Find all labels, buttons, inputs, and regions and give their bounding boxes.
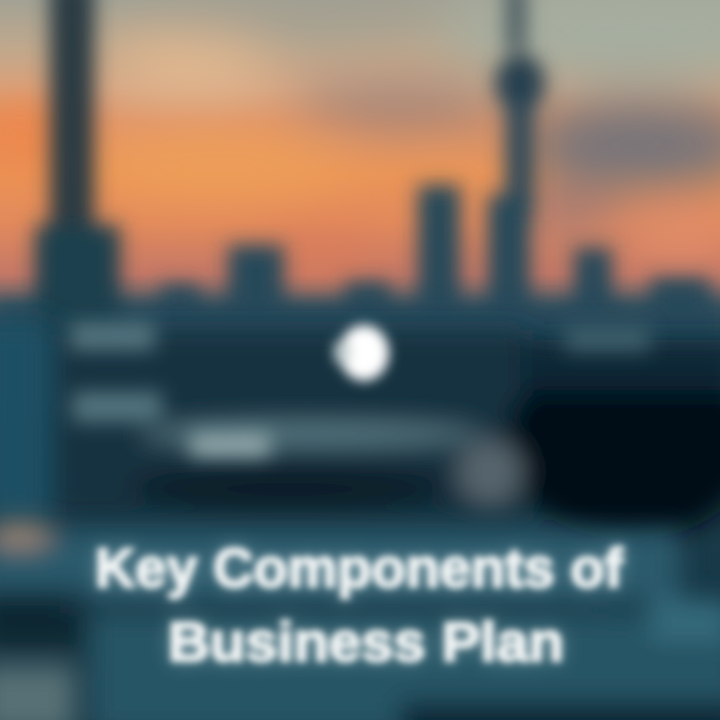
icon: skyline silhouettes — [0, 0, 720, 410]
title — [95, 536, 623, 673]
title banner background — [0, 522, 720, 720]
title glow: Key Components of — [95, 536, 623, 599]
lit building highlights — [70, 322, 650, 456]
title glow: Business Plan — [168, 610, 564, 673]
lower city tones — [0, 320, 720, 540]
icon: bright play symbol glow — [334, 325, 389, 381]
title glow — [95, 536, 623, 673]
title: Key Components of — [95, 536, 623, 599]
title: Business Plan — [168, 610, 564, 673]
sky colour clouds — [0, 0, 720, 275]
